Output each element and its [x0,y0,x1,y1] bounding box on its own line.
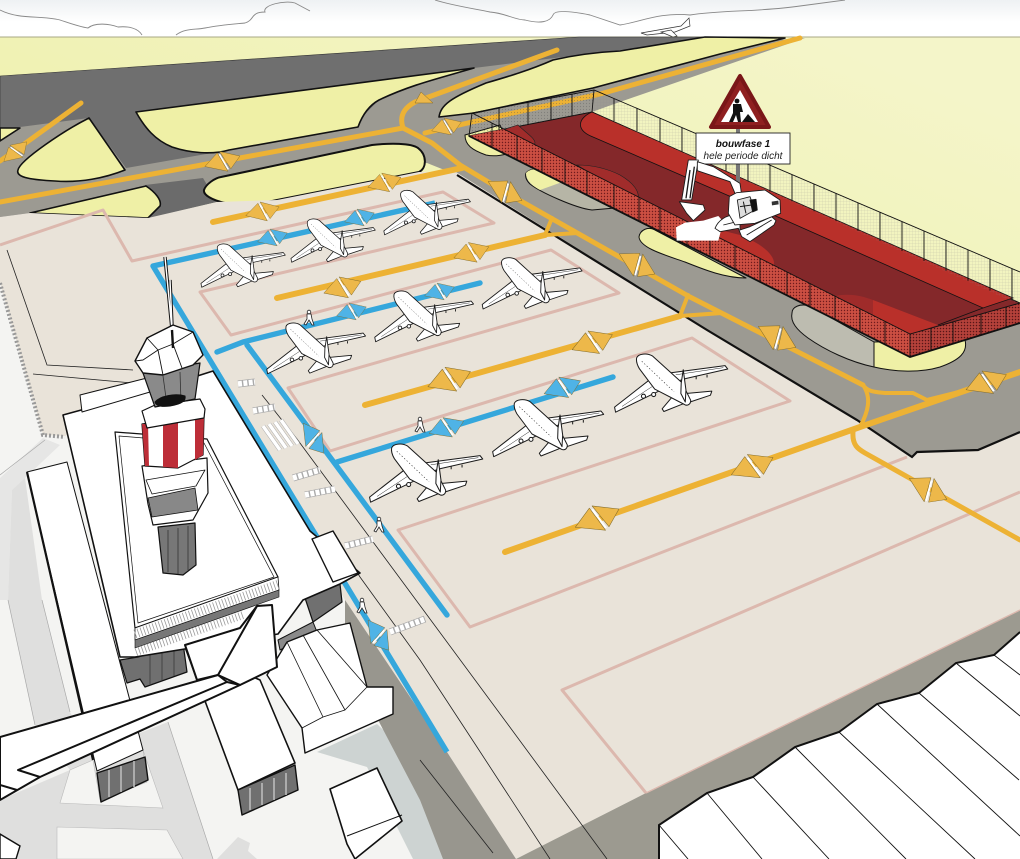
rubble pile [676,216,723,241]
tower striped band [142,416,204,468]
apron [0,172,1020,859]
tower cab glass [143,363,200,407]
pedestrian crossings [238,382,425,632]
lower grey verge [345,600,516,859]
excavator bucket [679,202,705,221]
red construction pit floor [469,112,1020,357]
small white corner roof [0,834,20,859]
excavator [676,160,781,242]
right side building [267,623,393,753]
lower terminal pier [185,647,298,815]
tower antenna [165,257,173,348]
excavator stick [682,160,698,200]
tower collar [142,399,205,428]
label: bouwfase 1 [696,133,790,164]
fence mesh left end [469,90,594,136]
excavator house [728,190,781,225]
fence lines and posts [469,90,1020,357]
runway [0,37,760,220]
hangar roof bottom right [659,632,1020,859]
excavator boom [697,162,742,195]
bottom left surroundings [0,283,520,859]
label: bouwfase 1: hele periode dicht [704,151,784,162]
grey strip by hangar [516,610,1020,859]
icon: road works warning sign [711,76,769,127]
aircraft stand markings [0,192,1020,793]
tower lower section [142,458,208,525]
sky with clouds [0,0,1020,37]
foreground aircraft tail [0,605,277,800]
wing [0,675,240,800]
apron edge [457,175,1020,457]
fence mesh back [592,90,1020,305]
small box building [330,768,402,859]
distant plane [641,18,690,37]
blue service routes [153,203,613,752]
dark patch between islands [145,178,217,218]
taxiway surface [0,38,1020,457]
label: bouwfase 1: bouwfase 1 [716,139,771,150]
apron boundary lines [7,250,607,859]
excavator tracks [715,215,776,242]
sign pole [736,128,740,193]
excavator window [737,197,755,218]
tail fin panel [185,605,277,685]
dotted fence wall right [910,303,1020,357]
ground staff figures [304,310,425,613]
grass field [0,37,1020,457]
terminal left wing building [27,462,148,802]
tower cap [135,325,203,375]
terminal building [63,371,360,687]
taxi routes [0,38,1020,552]
tower interior silhouette [155,395,185,406]
dotted fence wall front [469,129,910,357]
control tower [135,257,208,575]
parked aircraft [201,190,728,502]
grass islands [0,37,966,371]
yellow direction arrows [0,92,1011,540]
tower stem [158,523,196,575]
blue direction arrows [255,205,584,657]
hatched edge [0,283,65,437]
